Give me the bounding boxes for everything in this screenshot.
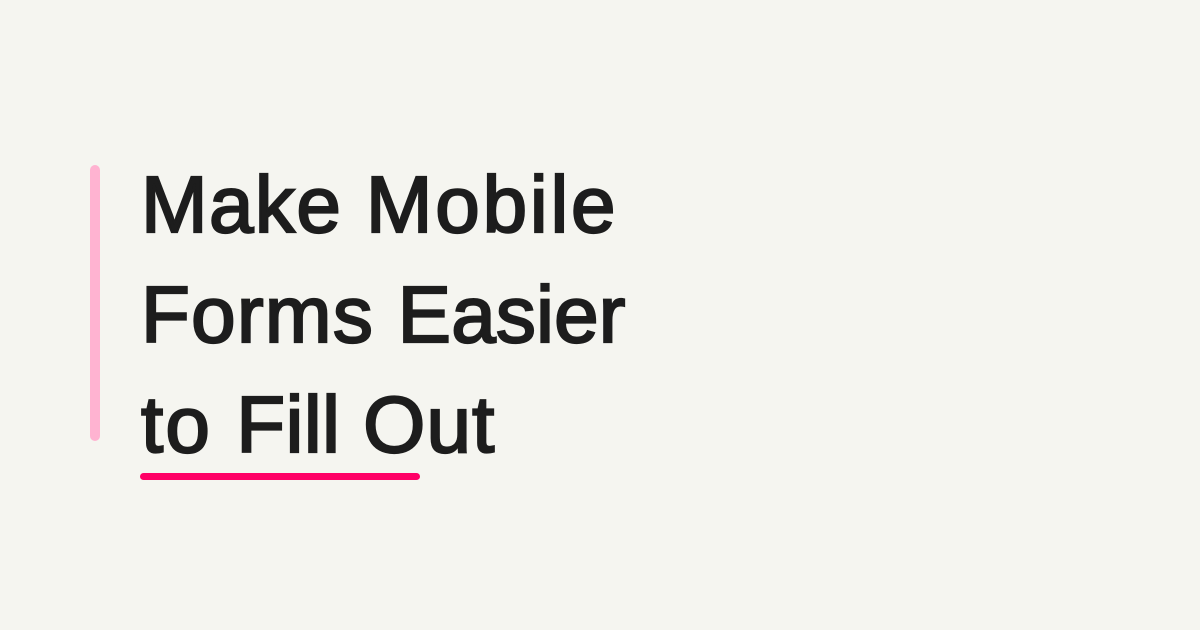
underline <box>140 473 420 480</box>
accent bar <box>90 165 100 441</box>
title: Forms Easier <box>141 270 626 359</box>
title <box>141 160 626 469</box>
title: to Fill Out <box>141 380 495 469</box>
title: Make Mobile <box>141 160 618 249</box>
